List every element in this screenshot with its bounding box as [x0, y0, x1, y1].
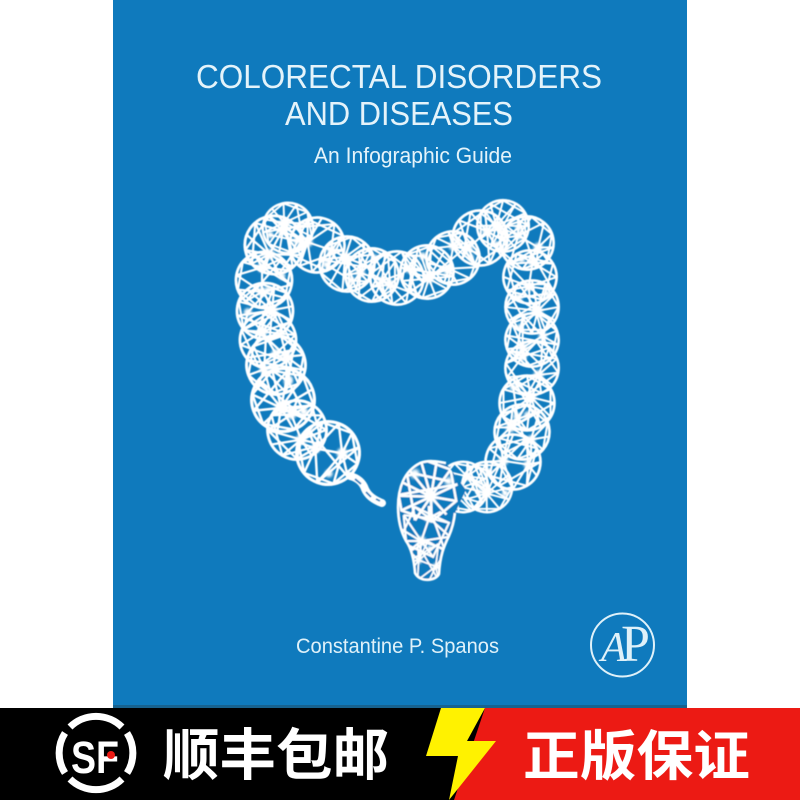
descending colon segments — [427, 191, 566, 523]
title — [196, 58, 602, 132]
publisher logo: AP: P — [621, 616, 650, 673]
colon tail — [350, 476, 382, 503]
illustration: colon made of a white network — [226, 191, 566, 591]
banner text: genuine guarantee: 正版保证 — [523, 712, 750, 791]
banner text: free SF shipping: 顺丰包邮 — [163, 711, 389, 792]
icon: SF logo — [59, 716, 133, 790]
rectum — [396, 459, 466, 582]
publisher logo: AP: A — [598, 625, 627, 671]
title: COLORECTAL DISORDERS — [196, 58, 602, 95]
book cover panel — [113, 0, 687, 708]
ascending colon segments — [226, 196, 368, 493]
author name: Constantine P. Spanos — [296, 635, 499, 658]
subtitle: An Infographic Guide — [314, 143, 512, 168]
transverse colon segments — [282, 206, 512, 311]
title: AND DISEASES — [285, 95, 513, 132]
icon: SF logo: SF — [71, 732, 119, 783]
publisher logo: AP — [591, 614, 654, 676]
banner: guarantee side — [454, 708, 800, 800]
icon: lightning bolt — [426, 708, 496, 800]
banner: shipping side — [0, 708, 490, 800]
